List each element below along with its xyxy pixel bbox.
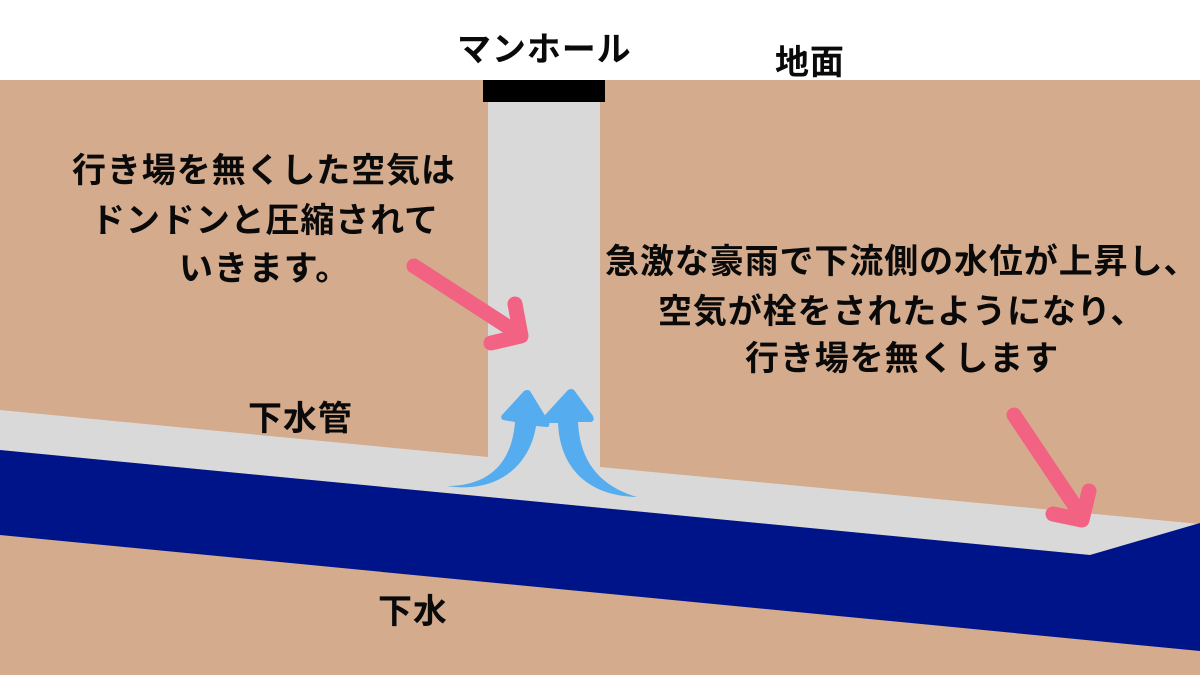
- text block: heavy rain explanation: 空気が栓をされたようになり、: [658, 292, 1145, 331]
- sewage water: [0, 450, 1200, 651]
- icon: left blue air arrow: [447, 390, 549, 487]
- text block: compressed air: いきます。: [179, 250, 350, 288]
- label: ground surface: 地面: [775, 44, 845, 82]
- label: sewage: 下水: [378, 593, 448, 631]
- text block: heavy rain explanation: 行き場を無くします: [745, 340, 1059, 378]
- icon: right blue air arrow: [545, 389, 637, 497]
- text block: heavy rain explanation: [605, 242, 1198, 378]
- arrow: pink arrow to pipe end: [1014, 415, 1089, 520]
- text block: heavy rain explanation: 急激な豪雨で下流側の水位が上昇し、: [605, 242, 1198, 281]
- air space: pipe and shaft: [0, 100, 1200, 555]
- label: sewer pipe: 下水管: [248, 400, 353, 438]
- manhole cover: [483, 80, 605, 102]
- arrow: pink arrow to shaft: [414, 266, 521, 343]
- text block: compressed air: [72, 152, 456, 288]
- label: manhole: マンホール: [457, 31, 632, 69]
- text block: compressed air: 行き場を無くした空気は: [72, 152, 456, 190]
- text block: compressed air: ドンドンと圧縮されて: [91, 202, 439, 240]
